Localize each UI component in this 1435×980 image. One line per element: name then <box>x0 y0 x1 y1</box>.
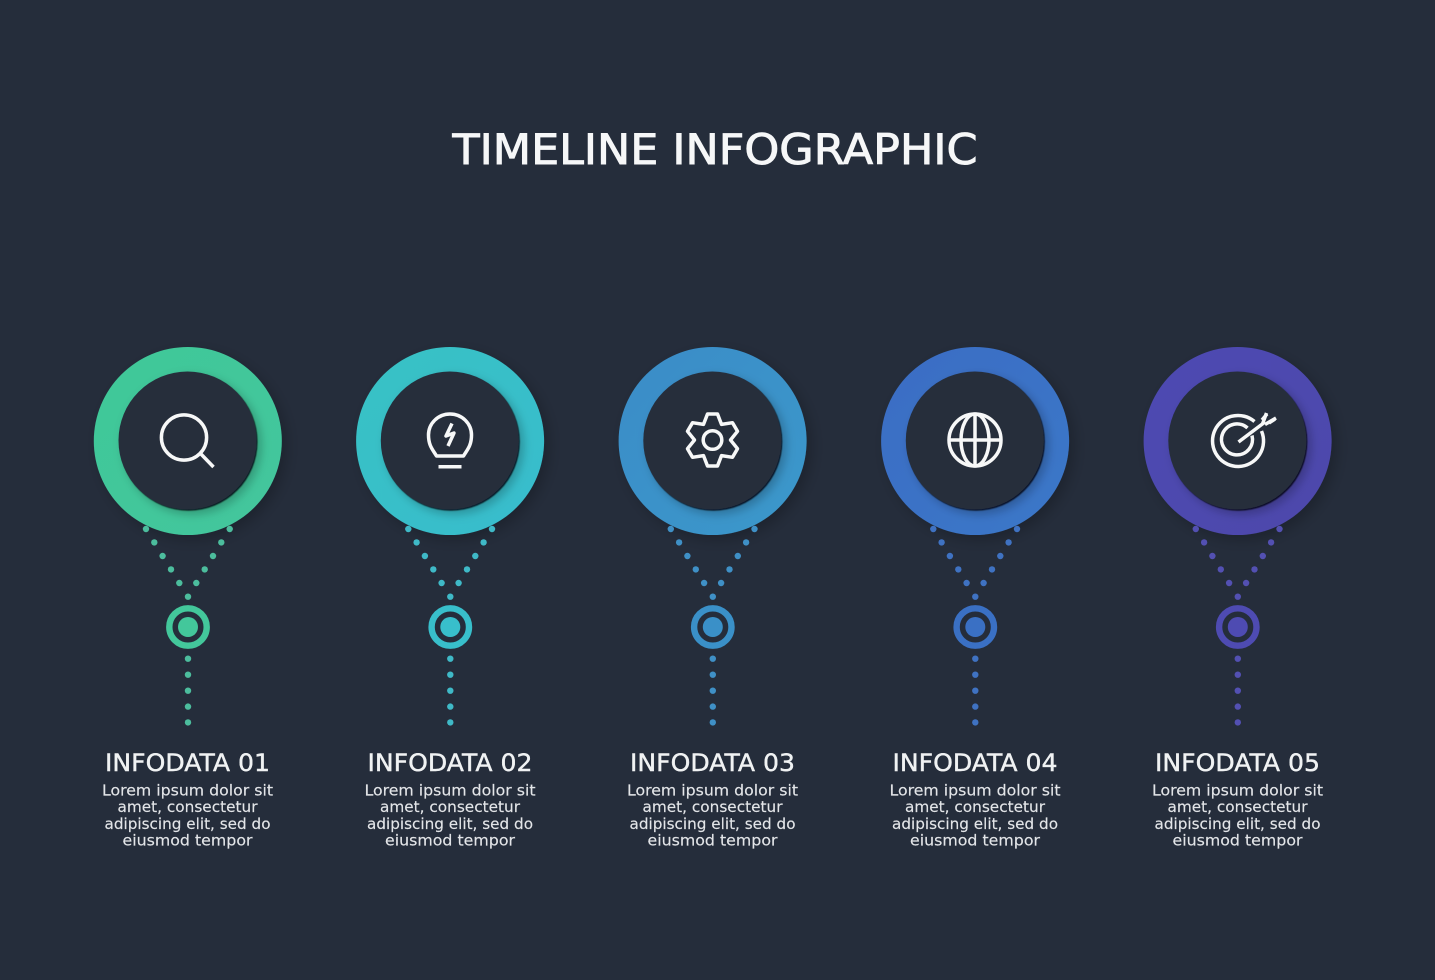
inner disc <box>381 372 519 510</box>
icon: magnifier <box>161 415 214 467</box>
connector dots above marker <box>405 526 495 600</box>
icon: light bulb <box>428 414 472 467</box>
connector dots below marker <box>710 656 716 726</box>
timeline marker <box>694 608 732 646</box>
panel: step 5 <box>1144 347 1332 850</box>
text block: Lorem ipsum dolor sit <box>627 782 798 800</box>
text block: Lorem ipsum dolor sit <box>364 782 536 800</box>
text block: Lorem ipsum dolor sit <box>102 782 273 800</box>
inner disc <box>118 372 256 510</box>
text block <box>890 782 1060 850</box>
connector dots below marker <box>447 656 453 726</box>
text block <box>364 782 536 850</box>
text block: adipiscing elit, sed do <box>630 815 796 833</box>
ring disc <box>356 347 544 535</box>
ring disc <box>1144 347 1332 535</box>
title: TIMELINE INFOGRAPHIC <box>451 125 978 174</box>
text block: adipiscing elit, sed do <box>104 815 270 833</box>
icon: globe <box>949 414 1001 466</box>
text block: amet, consectetur <box>905 798 1046 816</box>
text block: Lorem ipsum dolor sit <box>1152 782 1323 800</box>
text block: eiusmod tempor <box>1172 832 1303 850</box>
text block: adipiscing elit, sed do <box>1154 815 1320 833</box>
timeline marker <box>957 608 994 646</box>
icon: target with arrow <box>1213 413 1276 466</box>
heading: INFODATA 02 <box>368 749 532 777</box>
ring disc <box>619 347 807 535</box>
panel: step 4 <box>881 347 1069 850</box>
panel: step 2 <box>356 347 544 850</box>
timeline marker <box>432 608 469 646</box>
heading: INFODATA 04 <box>892 749 1058 777</box>
heading: INFODATA 03 <box>630 749 795 777</box>
text block: eiusmod tempor <box>910 832 1041 850</box>
connector dots below marker <box>972 656 978 726</box>
text block: eiusmod tempor <box>122 832 253 850</box>
text block <box>102 782 273 850</box>
text block: adipiscing elit, sed do <box>367 815 533 833</box>
ring disc <box>94 347 282 535</box>
text block <box>627 782 798 850</box>
heading: INFODATA 01 <box>105 749 270 777</box>
text block: amet, consectetur <box>642 798 783 816</box>
text block: Lorem ipsum dolor sit <box>890 782 1060 800</box>
ring disc <box>881 347 1069 535</box>
text block: amet, consectetur <box>380 798 521 816</box>
icon: gear <box>688 414 738 466</box>
text block: eiusmod tempor <box>648 832 778 850</box>
panel: step 3 <box>619 347 807 850</box>
heading: INFODATA 05 <box>1155 749 1320 777</box>
inner disc <box>643 372 781 510</box>
text block: eiusmod tempor <box>385 832 516 850</box>
connector dots below marker <box>1235 656 1241 726</box>
connector dots above marker <box>1193 526 1283 600</box>
text block: amet, consectetur <box>1168 798 1308 816</box>
text block: amet, consectetur <box>118 798 258 816</box>
connector dots above marker <box>930 526 1020 600</box>
timeline marker <box>169 608 207 646</box>
inner disc <box>906 372 1044 510</box>
inner disc <box>1168 372 1306 510</box>
connector dots below marker <box>185 656 191 726</box>
connector dots above marker <box>668 526 758 600</box>
text block: adipiscing elit, sed do <box>892 815 1058 833</box>
timeline marker <box>1219 608 1257 646</box>
text block <box>1152 782 1323 850</box>
connector dots above marker <box>143 526 233 600</box>
panel: step 1 <box>94 347 282 850</box>
